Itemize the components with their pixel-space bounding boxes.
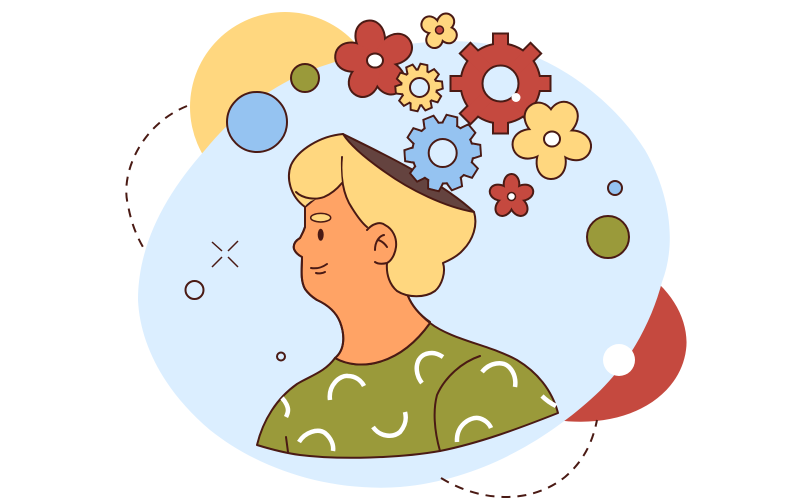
inner ear (375, 235, 387, 250)
gear: large red (450, 34, 550, 134)
white circle (603, 344, 635, 376)
blue circle (227, 92, 287, 152)
shirt (257, 323, 558, 458)
flower: large red (335, 19, 416, 101)
dashed arc left (126, 106, 187, 247)
light blue blob (138, 41, 670, 488)
mouth (311, 264, 327, 273)
flower: small red (489, 175, 534, 218)
person (257, 134, 558, 458)
ear (367, 223, 396, 264)
small fold (286, 437, 288, 452)
front hair (289, 134, 343, 207)
flower: small yellow (420, 12, 458, 49)
face profile (294, 207, 343, 358)
small blue circle (608, 181, 622, 195)
back hair (336, 134, 476, 296)
flower: large yellow (511, 98, 593, 178)
yellow background circle (190, 12, 380, 202)
red background shape (556, 270, 687, 422)
olive circle right (587, 216, 629, 258)
olive circle top (291, 64, 319, 92)
gear: small yellow (395, 64, 443, 111)
sparkle cross (212, 241, 238, 267)
dashed arc bottom (441, 420, 597, 497)
brown scalp outline (343, 134, 474, 212)
sleeve line (435, 356, 480, 451)
eye (318, 229, 324, 241)
neck and face skin (294, 170, 430, 365)
back hair outline (341, 157, 475, 296)
ring left (186, 281, 204, 299)
small ring (277, 352, 285, 360)
eyebrow (311, 213, 331, 222)
front hair outline (289, 134, 343, 207)
neck right line (408, 296, 430, 322)
gear: blue (404, 114, 481, 192)
shirt pattern (282, 353, 556, 451)
